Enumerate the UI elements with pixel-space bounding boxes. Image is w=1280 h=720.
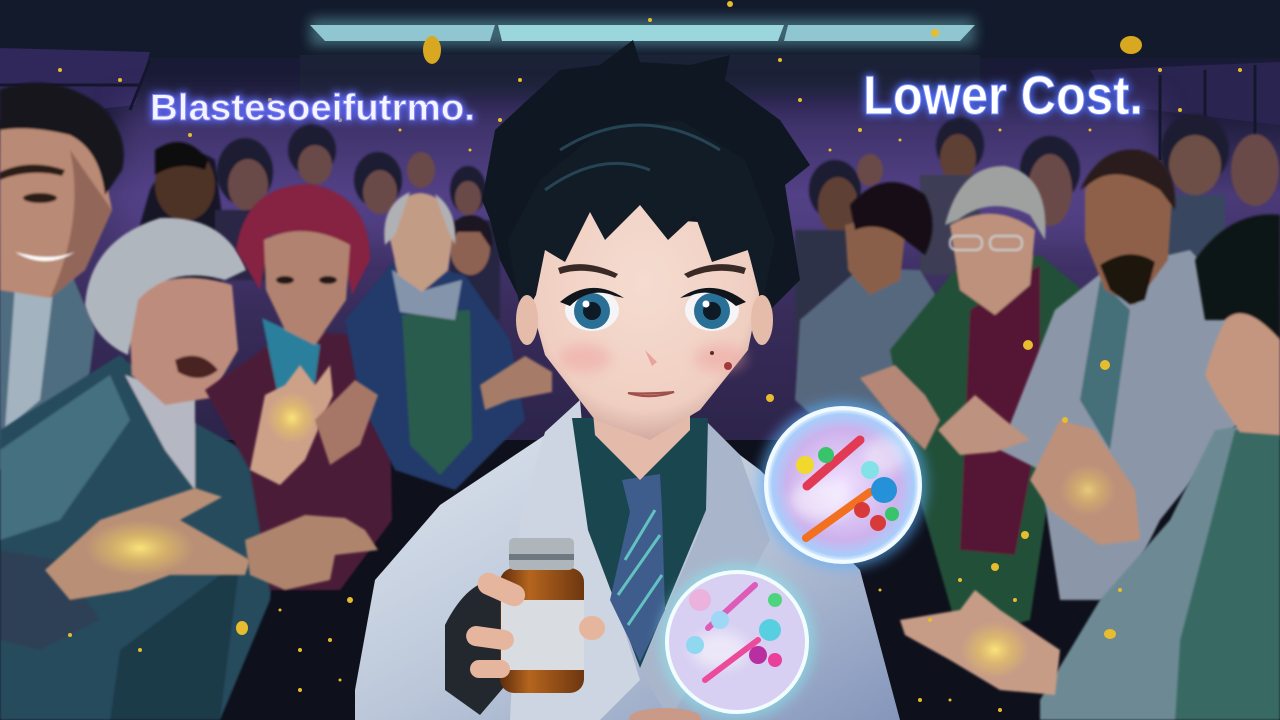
- headline left: Blastesoeifutrmo.: [150, 87, 475, 128]
- hand: blue coat man: [480, 356, 552, 410]
- hand under lower orb: [629, 708, 701, 720]
- headline right: Lower Cost.: [863, 64, 1143, 126]
- medicine bottle and hand: [445, 538, 605, 715]
- hand: reaching centre left: [245, 515, 378, 590]
- person: man with curly hair: [795, 182, 945, 450]
- tie: [610, 474, 665, 662]
- soft blobs: [692, 632, 748, 668]
- hair fringe: [508, 120, 775, 320]
- person: old man in blue coat: [345, 192, 525, 490]
- shirt: [572, 418, 708, 668]
- neck: [592, 400, 690, 480]
- headline right: Lower Cost.: [863, 64, 1143, 126]
- label: [501, 600, 584, 670]
- fingers: [465, 569, 605, 678]
- hand: green jacket man: [860, 365, 940, 450]
- hand: grey shirt man: [938, 395, 1030, 455]
- hand: woman in red: [315, 380, 378, 465]
- person: old man in green jacket: [890, 166, 1082, 640]
- face: [527, 170, 760, 440]
- coat lapels: [510, 400, 640, 720]
- molecule orb lower: [659, 564, 815, 720]
- ears: [516, 295, 538, 345]
- soft blobs: [790, 480, 850, 520]
- cheeks: [559, 344, 611, 372]
- molecule orb upper: [759, 401, 927, 569]
- molecule sticks: [705, 640, 758, 680]
- lab coat: [355, 425, 900, 720]
- hair back: [482, 40, 810, 320]
- person: woman at far right: [1040, 215, 1280, 720]
- person: old man with teal robe: [0, 218, 280, 720]
- glowing hand lower right: [900, 590, 1060, 695]
- person: bearded man in grey shirt: [1000, 150, 1245, 600]
- background crowd: [130, 114, 1279, 360]
- molecule sticks: [807, 440, 860, 486]
- person: woman with red hair: [205, 184, 392, 590]
- person: man at far left: [0, 83, 124, 470]
- robotic fingers: [445, 580, 510, 715]
- nose and mouth: [645, 350, 657, 366]
- headline left: Blastesoeifutrmo.: [150, 87, 475, 128]
- hand: right middle glowing: [1030, 420, 1140, 545]
- bottle: [500, 568, 584, 693]
- hand: raised old man: [250, 365, 333, 485]
- glowing hand lower left: [45, 488, 250, 600]
- eyes: [558, 264, 746, 331]
- ceiling lights: [310, 18, 975, 46]
- hair highlights: [545, 125, 720, 190]
- central figure: [355, 40, 900, 720]
